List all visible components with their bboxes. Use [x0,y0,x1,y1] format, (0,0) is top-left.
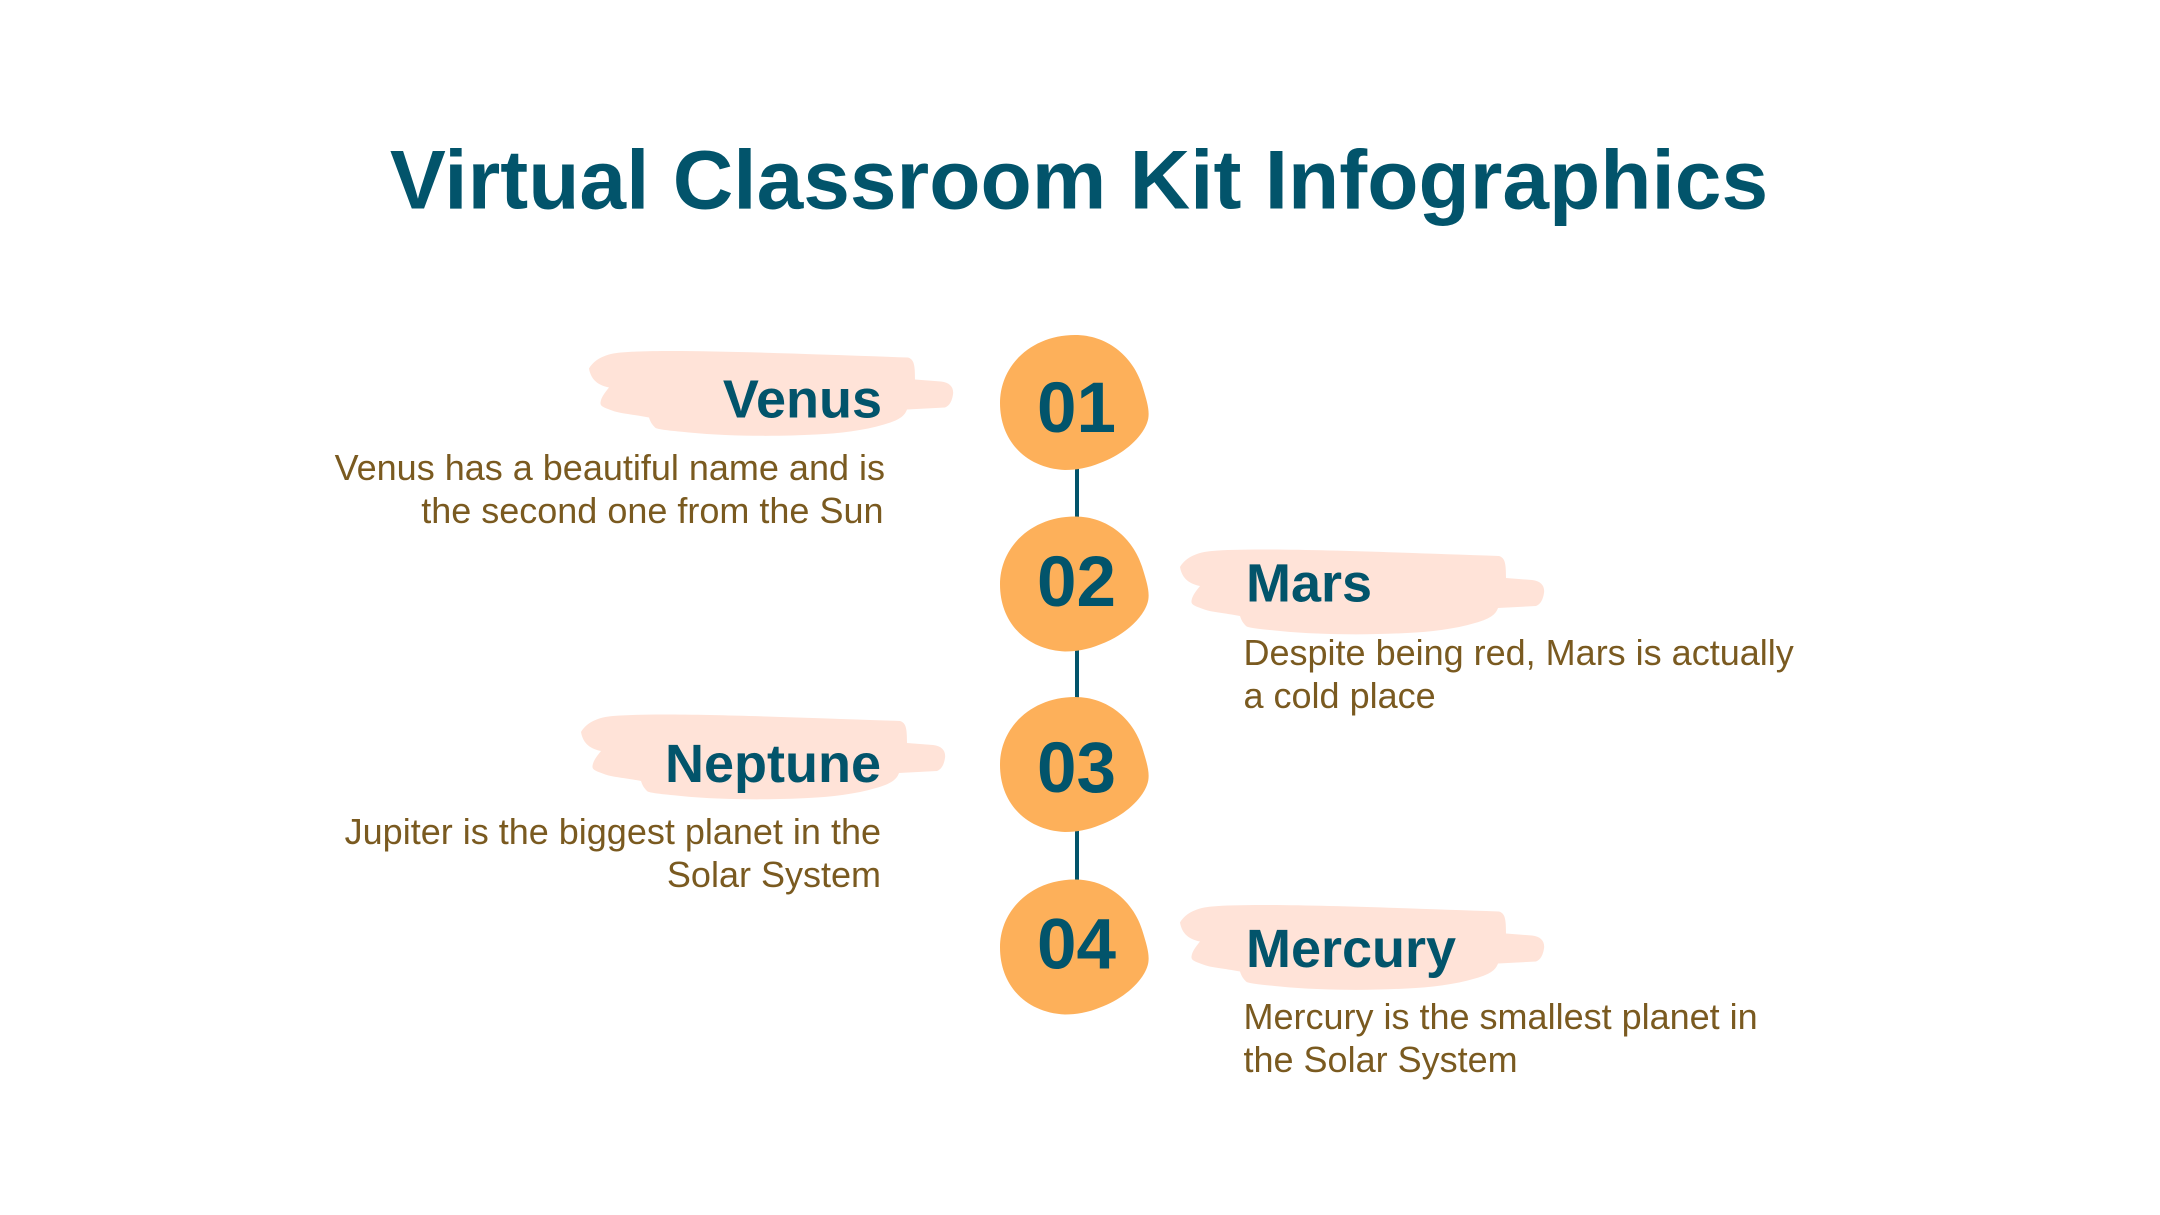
description: Mercury: the Solar System [1244,1039,1518,1080]
brush highlight: Neptune [581,715,945,799]
brush highlight: Mars [1180,550,1544,634]
connector lines [1075,465,1079,883]
step 04: number blob: 04 [1037,906,1116,984]
step 01: number blob: 01 [1037,369,1116,448]
step 03: number blob [1000,697,1149,832]
description: Venus: the second one from the Sun [421,490,884,531]
step 02: number blob [1000,516,1149,652]
description: Mercury: Mercury is the smallest planet in [1244,996,1758,1037]
panel: Venus [335,351,953,531]
heading: Venus: Venus [723,370,882,430]
brush highlight: Mercury [1180,905,1544,990]
step 04: number blob [1000,880,1149,1014]
description: Mars: Despite being red, Mars is actually [1244,632,1794,673]
step 02: number blob: 02 [1037,543,1116,622]
heading: Mars: Mars [1246,554,1372,614]
panel: Mars [1180,550,1794,716]
description: Venus: Venus has a beautiful name and is [335,447,885,488]
panel: Mercury [1180,905,1758,1080]
description: Neptune: Solar System [667,854,881,895]
heading: Mercury: Mercury [1246,919,1456,979]
title: Virtual Classroom Kit Infographics [390,132,1768,226]
description: Neptune: Jupiter is the biggest planet in the [345,811,881,852]
brush highlight: Venus [589,351,953,436]
step 01: number blob [1000,335,1149,470]
heading: Neptune: Neptune [665,734,881,794]
step 03: number blob: 03 [1037,729,1116,808]
description: Mars: a cold place [1244,675,1436,716]
panel: Neptune [345,715,945,895]
